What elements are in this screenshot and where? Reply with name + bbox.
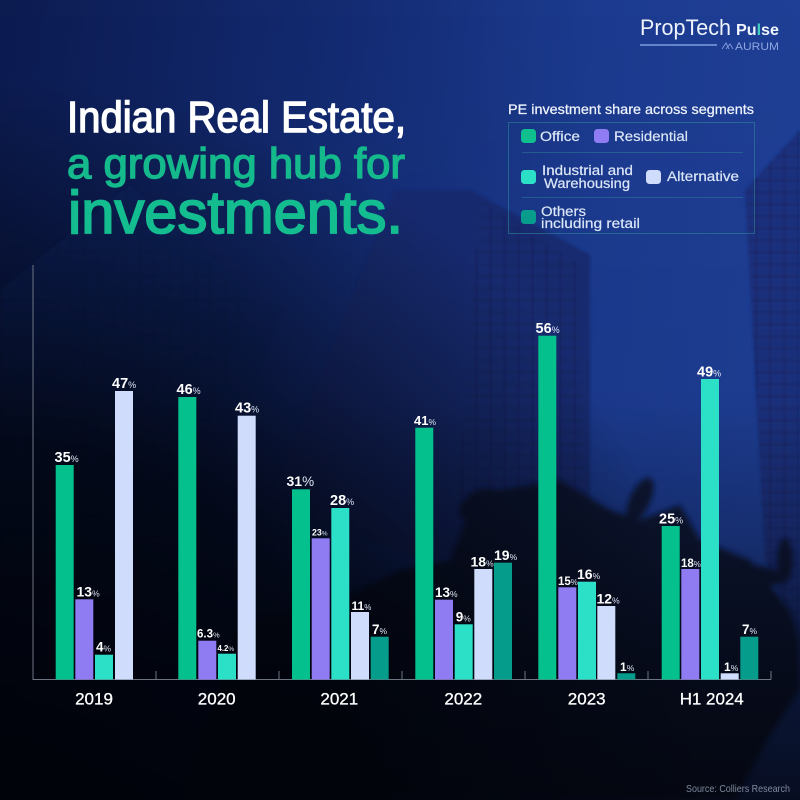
legend item: Alternative: [646, 169, 739, 184]
bar: Residential 13%: 13%: [435, 585, 458, 600]
bar: Others 19%: [494, 547, 518, 680]
bar: Industrial 4%: 4%: [96, 640, 112, 654]
bar: Industrial 4.2%: [218, 644, 236, 680]
chart: year 2021: [286, 473, 389, 708]
bar: Industrial 49%: [697, 364, 721, 680]
bar: Alternative 11%: 11%: [352, 599, 371, 613]
legend item: Industrial and Warehousing: Warehousing: [544, 176, 630, 191]
bar: Others 7%: [740, 622, 758, 680]
legend item: Residential: Residential: [614, 129, 688, 144]
legend panel: [508, 101, 754, 234]
year label 2021: 2021: [320, 690, 358, 708]
logo: PropTech Pulse Aurum: Pulse: [736, 22, 779, 39]
bar: Office 25%: [659, 512, 683, 680]
bar: Others 7%: 7%: [742, 622, 758, 637]
legend item: Industrial and Warehousing: [521, 163, 633, 191]
bar: Residential 6.3%: 6.3%: [197, 628, 220, 640]
bar: Office 31%: [286, 473, 314, 680]
legend item: Office: [521, 129, 580, 144]
bar: Alternative 18%: 18%: [470, 554, 494, 570]
bar: Office 46%: [176, 382, 201, 680]
title: investments.: [68, 179, 403, 246]
bar: Industrial 4%: [95, 640, 113, 680]
chart: year 2020: [176, 382, 259, 708]
bar: Alternative 11%: [351, 599, 371, 680]
bar: Office 56%: 56%: [536, 321, 560, 337]
year label H1 2024: H1 2024: [680, 690, 744, 708]
bar: Office 35%: 35%: [54, 450, 79, 466]
bar: Industrial 9%: 9%: [456, 610, 471, 624]
title: Indian Real Estate,: [67, 93, 406, 142]
legend item: Others including retail: [521, 204, 640, 231]
bar: Residential 18%: [681, 558, 701, 680]
bar: Residential 13%: [435, 585, 458, 680]
bar: Office 46%: 46%: [176, 382, 201, 398]
bar: Office 41%: [414, 413, 436, 680]
chart axes: [33, 265, 771, 680]
bar: Industrial 49%: 49%: [697, 364, 721, 380]
legend item: Alternative: Alternative: [667, 169, 739, 184]
bar: Alternative 1%: 1%: [724, 660, 739, 674]
bar: Office 56%: [536, 321, 560, 680]
bar: Office 35%: [54, 450, 79, 680]
background: foliage silhouette: [180, 474, 800, 800]
title: [67, 93, 406, 246]
year label 2023: 2023: [568, 690, 606, 708]
year label 2019: 2019: [75, 690, 113, 708]
year label 2022: 2022: [444, 690, 482, 708]
logo: PropTech Pulse Aurum: [640, 15, 779, 53]
bar: Others 1%: 1%: [620, 660, 635, 674]
chart: year 2023: [536, 321, 635, 708]
chart: year 2019: [54, 376, 136, 708]
legend panel: PE investment share across segments: [508, 101, 754, 117]
legend item: Others including retail: including retail: [541, 216, 640, 231]
title: a growing hub for: [67, 140, 405, 188]
bar: Office 31%: 31%: [286, 473, 314, 489]
bar: Alternative 43%: [235, 400, 259, 680]
bar: Residential 23%: [312, 528, 330, 680]
bar: Industrial 16%: 16%: [577, 566, 601, 582]
background: apartment towers: [0, 130, 800, 640]
bar: Industrial 9%: [455, 610, 473, 680]
year label 2020: 2020: [198, 690, 236, 708]
bar: Residential 13%: [75, 584, 100, 680]
logo: PropTech Pulse Aurum: AURUM: [735, 41, 779, 53]
bar: Industrial 28%: 28%: [330, 493, 354, 509]
bar: Others 7%: [371, 622, 389, 680]
bar: Alternative 43%: 43%: [235, 400, 259, 416]
bar: Office 41%: 41%: [414, 413, 436, 428]
bar: Residential 18%: 18%: [681, 558, 701, 570]
logo: PropTech Pulse Aurum: PropTech: [640, 15, 731, 40]
chart: year 2022: [414, 413, 518, 708]
bar: Alternative 18%: [470, 554, 494, 680]
bar: Alternative 12%: 12%: [596, 590, 620, 606]
legend item: Industrial and Warehousing: Industrial and: [542, 163, 633, 178]
bar: Residential 23%: 23%: [312, 528, 328, 538]
bar: Industrial 16%: [577, 566, 601, 680]
legend item: Others including retail: Others: [541, 204, 586, 219]
bar: Residential 15%: [558, 576, 578, 680]
bar: Residential 6.3%: [197, 628, 220, 680]
bar: Alternative 47%: 47%: [112, 376, 136, 392]
bar: Industrial 28%: [330, 493, 354, 680]
bar: Residential 13%: 13%: [76, 584, 100, 600]
bar: Others 1%: [617, 660, 635, 680]
bar: Others 7%: 7%: [372, 622, 388, 637]
bar: Alternative 1%: [721, 660, 739, 680]
chart: year H1 2024: [659, 364, 758, 708]
bar: Office 25%: 25%: [659, 512, 683, 528]
bar: Alternative 47%: [112, 376, 136, 680]
bar: Others 19%: 19%: [494, 547, 518, 563]
bar: Industrial 4.2%: 4.2%: [218, 644, 234, 653]
bar: Residential 15%: 15%: [558, 576, 578, 588]
legend item: Office: Office: [540, 129, 580, 144]
bar: Alternative 12%: [596, 590, 620, 680]
